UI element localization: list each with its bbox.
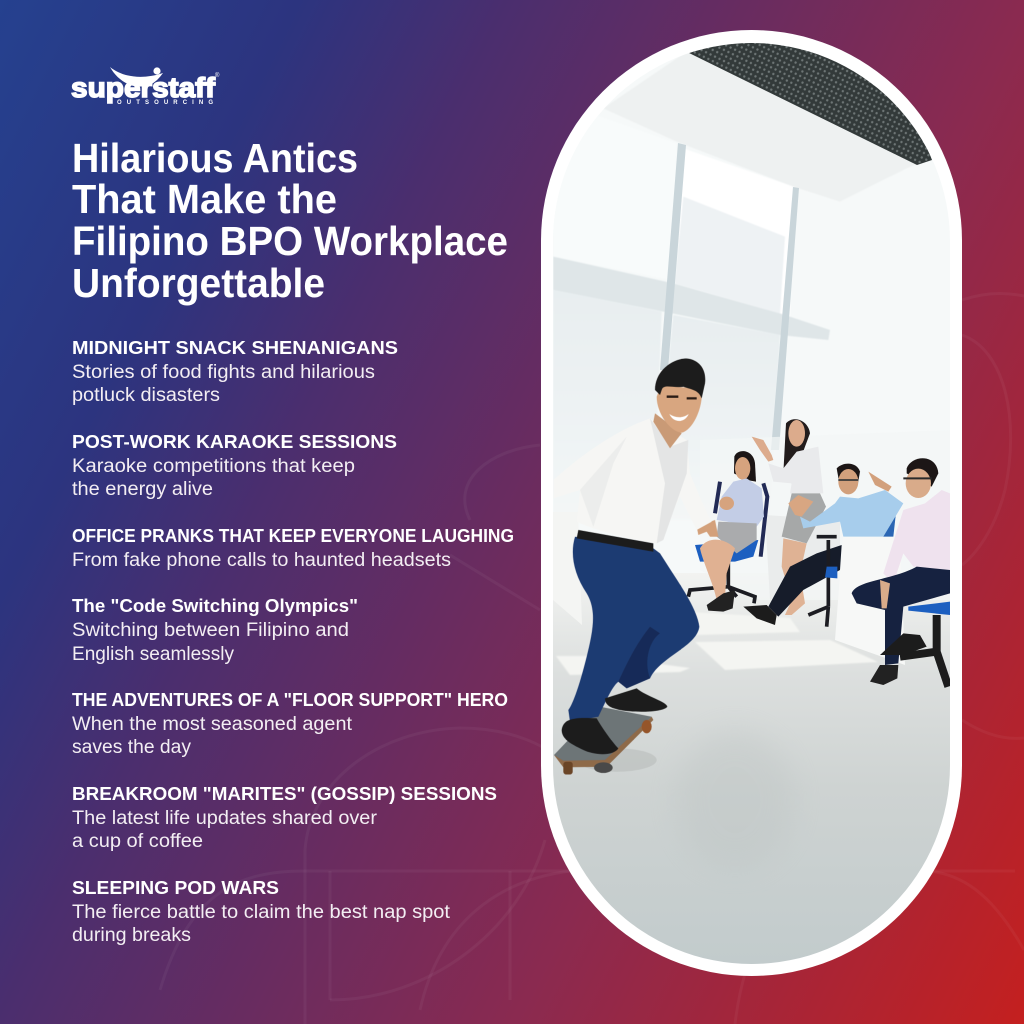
list item: floor support hero: saves the day: [72, 737, 191, 758]
logo dot: [153, 67, 161, 75]
list item: office pranks: OFFICE PRANKS THAT KEEP EVERYONE LAUGHING: [72, 525, 514, 546]
photo: office skateboarding scene: [553, 40, 950, 964]
blouse: [768, 447, 823, 493]
chair seat: [825, 567, 837, 578]
list item: post-work karaoke sessions: Karaoke competitions that keep: [72, 456, 355, 477]
list item: office pranks: From fake phone calls to haunted headsets: [72, 550, 451, 571]
list item: code switching olympics: Switching between Filipino and: [72, 620, 349, 641]
ceiling plane: [603, 52, 918, 202]
man in pink shirt: [852, 458, 950, 687]
list item: midnight snack shenanigans: [72, 337, 398, 406]
chair frame: [808, 537, 837, 627]
floor light patches: [556, 612, 878, 675]
list item: floor support hero: When the most seasoned agent: [72, 714, 353, 735]
list item: midnight snack shenanigans: Stories of food fights and hilarious: [72, 362, 375, 383]
hand: [697, 520, 718, 537]
hand: [880, 580, 890, 608]
skateboard shadow: [577, 748, 657, 772]
front shoe: [605, 688, 667, 712]
woman seated: [688, 451, 767, 612]
reaching hand: [788, 495, 813, 517]
list item: post-work karaoke sessions: [72, 431, 397, 500]
legs: [782, 538, 807, 615]
skateboard: [554, 707, 652, 764]
eyes: [667, 397, 697, 398]
jeans shading: [618, 627, 660, 688]
shaded window band: [553, 257, 830, 340]
floor soft shade: [675, 730, 795, 870]
hair: [907, 458, 938, 487]
face: [657, 383, 702, 433]
left window pane: [553, 100, 677, 280]
list item: code switching olympics: [72, 595, 358, 665]
title: Unforgettable: [72, 260, 325, 306]
list item: sleeping pod wars: The fierce battle to claim the best nap spot: [72, 902, 451, 923]
skirt: [717, 522, 757, 553]
shirt folds: [650, 418, 688, 543]
chair seat: [908, 602, 950, 615]
face: [906, 469, 931, 498]
desk left: [556, 601, 582, 624]
list item: midnight snack shenanigans: potluck disasters: [72, 385, 220, 406]
title: Hilarious Antics: [72, 135, 358, 181]
logo tagline: OUTSOURCING: [117, 100, 213, 106]
neck: [653, 413, 682, 448]
chair seat: [695, 540, 758, 562]
list item: breakroom marites: [72, 783, 497, 852]
list item: post-work karaoke sessions: POST-WORK KARAOKE SESSIONS: [72, 431, 397, 452]
waving hand: [868, 472, 892, 492]
jeans: [568, 537, 699, 722]
title: That Make the: [72, 176, 337, 222]
chair back: [715, 482, 767, 557]
chair base: [688, 560, 755, 603]
background pattern: faint arcs: [160, 293, 1024, 1024]
middle window pane: [677, 148, 793, 320]
front shoe: [870, 665, 898, 685]
logo registered mark: ®: [215, 72, 220, 79]
hair: [655, 358, 705, 398]
shoe: [743, 605, 777, 625]
face: [838, 469, 858, 494]
shoes: [707, 590, 735, 612]
chair frame: [900, 615, 948, 687]
face: [735, 457, 750, 480]
list item: code switching olympics: English seamlessly: [72, 644, 234, 665]
shirt: [883, 490, 950, 583]
glasses: [903, 475, 932, 481]
back wall behind people: [771, 436, 780, 450]
list item: sleeping pod wars: during breaks: [72, 925, 191, 946]
logo wordmark: superstaff: [71, 72, 216, 103]
list item: breakroom marites: BREAKROOM "MARITES" (GOSSIP) SESSIONS: [72, 783, 497, 804]
list item: office pranks: [72, 525, 514, 571]
list item: breakroom marites: The latest life updates shared over: [72, 808, 378, 829]
ponytail hair: [783, 419, 810, 483]
list item: breakroom marites: a cup of coffee: [72, 831, 203, 852]
hair: [734, 451, 756, 482]
rear shoe: [880, 633, 927, 655]
skirt: [782, 493, 826, 543]
title: Filipino BPO Workplace: [72, 218, 508, 264]
belt: [577, 530, 653, 552]
shirt: [553, 418, 712, 543]
list item: code switching olympics: The "Code Switching Olympics": [72, 595, 358, 616]
window mullions: [660, 143, 799, 450]
face: [788, 420, 805, 447]
trousers: [852, 567, 950, 665]
logo swoosh: [110, 67, 163, 86]
list item: midnight snack shenanigans: MIDNIGHT SNACK SHENANIGANS: [72, 337, 398, 358]
trousers: [768, 545, 842, 617]
list item: sleeping pod wars: [72, 877, 451, 946]
ceiling mesh: [687, 40, 932, 165]
desk back: [766, 516, 840, 592]
office wall base: [578, 58, 950, 573]
desk right: [835, 600, 905, 665]
logo: superstaff outsourcing: [71, 67, 220, 106]
list item: post-work karaoke sessions: the energy alive: [72, 479, 213, 500]
blouse: [717, 478, 764, 527]
legs: [700, 540, 735, 600]
main man skateboarder: [553, 358, 718, 774]
list item: floor support hero: THE ADVENTURES OF A "FLOOR SUPPORT" HERO: [72, 689, 508, 710]
lower window panes: [553, 290, 662, 520]
windows and ceiling: [553, 150, 830, 426]
chair back: [883, 507, 897, 537]
man in blue shirt: [743, 464, 903, 627]
photo capsule white frame: [541, 30, 962, 976]
glasses: [838, 479, 858, 481]
title: [72, 135, 508, 306]
hands: [719, 497, 734, 510]
floor: [553, 573, 950, 964]
hair: [837, 464, 860, 487]
rear shoe: [562, 718, 618, 754]
smile: [669, 414, 689, 421]
raised hand: [752, 437, 773, 462]
list item: sleeping pod wars: SLEEPING POD WARS: [72, 877, 279, 898]
shirt: [800, 490, 903, 537]
woman standing: [752, 419, 826, 615]
list item: floor support hero: [72, 689, 508, 758]
